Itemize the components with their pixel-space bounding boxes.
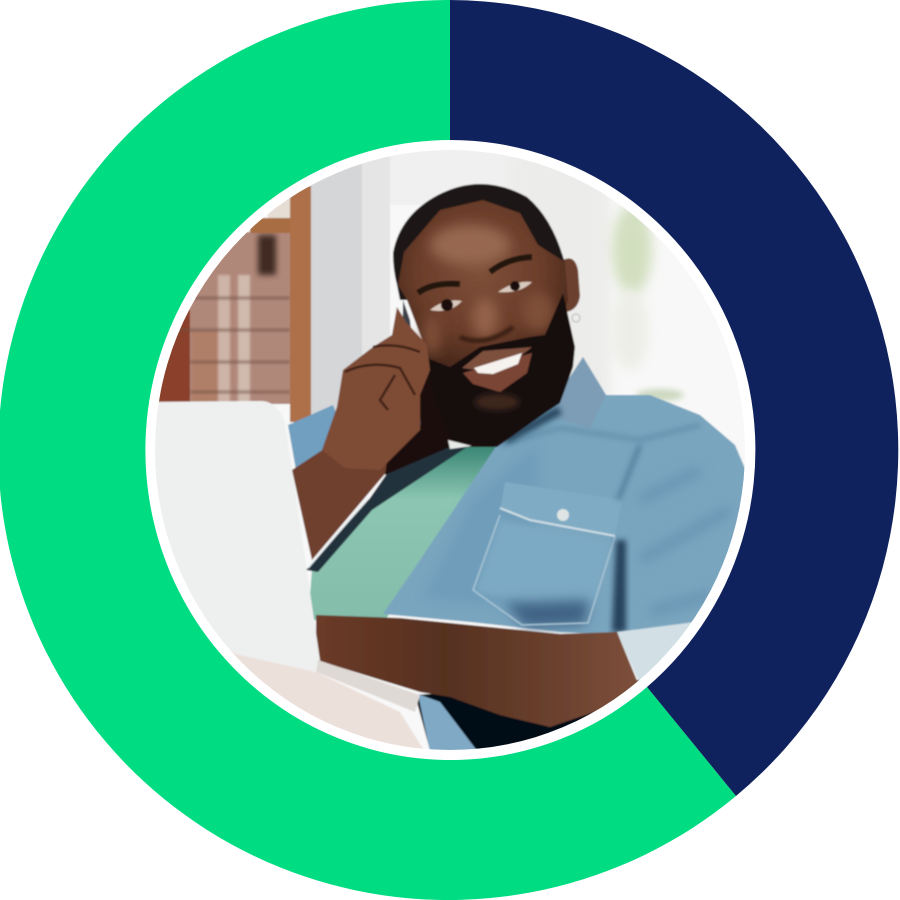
man: far shirt shoulder xyxy=(287,404,336,468)
man: shirt placket xyxy=(306,440,470,572)
lap: cream trousers xyxy=(232,652,423,748)
bookshelf xyxy=(150,186,311,422)
man: hair xyxy=(393,184,564,300)
man: teeth xyxy=(474,353,522,374)
man: denim hem xyxy=(418,694,478,752)
man: upper arm xyxy=(292,445,395,560)
man: beard xyxy=(430,294,576,421)
man: lower lip xyxy=(463,353,532,392)
photo background wall xyxy=(248,150,744,746)
man: upper lip xyxy=(462,347,532,370)
man: phone xyxy=(402,300,421,428)
man: nose shadow xyxy=(460,327,513,341)
man: shirt shading and details xyxy=(420,357,730,632)
man: earring xyxy=(572,314,580,322)
portrait photo xyxy=(140,140,760,760)
man: ear xyxy=(560,258,580,312)
man: rolled cuff xyxy=(617,622,695,684)
man: t-shirt xyxy=(308,445,500,620)
man: chin patch xyxy=(475,394,519,410)
man: denim shirt xyxy=(383,357,750,635)
face highlights xyxy=(423,225,554,355)
man: neck and hand shadow xyxy=(384,355,544,476)
man: forearm xyxy=(316,615,638,727)
man: dark under arm xyxy=(415,680,640,750)
donut segment: navy xyxy=(450,0,898,796)
man: head xyxy=(398,199,568,368)
man: finger lines xyxy=(345,345,420,410)
man: eyes xyxy=(418,257,532,311)
man: hand xyxy=(322,307,430,470)
laptop base edge xyxy=(316,660,420,712)
laptop xyxy=(140,401,320,672)
man: undershirt collar xyxy=(448,440,472,449)
